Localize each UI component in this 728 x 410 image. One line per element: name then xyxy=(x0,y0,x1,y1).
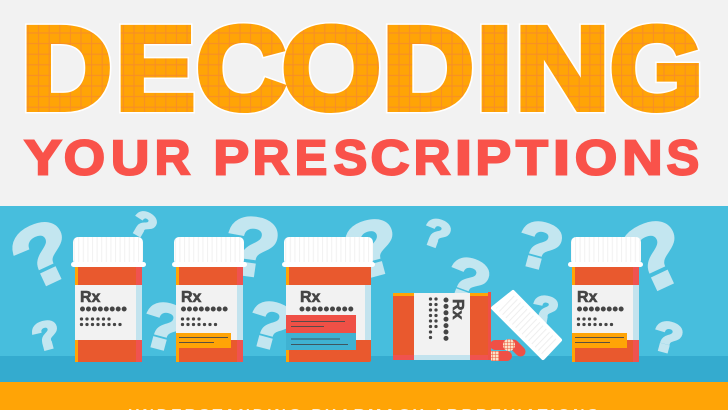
orange sticker xyxy=(572,333,627,348)
title: DECODING: D xyxy=(21,3,112,135)
question marks: ? xyxy=(28,311,65,360)
question marks: ? xyxy=(218,199,285,297)
red sticker xyxy=(286,315,356,333)
label text: Rx: Rx xyxy=(181,289,202,306)
subtitle: YOUR PRESCRIPTIONS: S xyxy=(666,132,699,186)
subtitle: YOUR PRESCRIPTIONS: R xyxy=(155,132,190,186)
bottle cap: fallen xyxy=(493,292,560,358)
question marks xyxy=(0,196,705,367)
title: DECODING xyxy=(21,3,703,135)
title: DECODING: E xyxy=(116,3,195,135)
bottle 1 xyxy=(71,237,146,362)
subtitle: YOUR PRESCRIPTIONS: R xyxy=(414,132,450,186)
title: DECODING: O xyxy=(282,3,381,135)
pills xyxy=(490,337,528,361)
orange sticker xyxy=(176,333,231,348)
subtitle: YOUR PRESCRIPTIONS: P xyxy=(475,132,511,186)
title: DECODING: N xyxy=(515,3,610,135)
subtitle: YOUR PRESCRIPTIONS: P xyxy=(213,132,249,186)
background: shelf xyxy=(0,356,728,382)
title: DECODING: I xyxy=(476,3,513,135)
subtitle: YOUR PRESCRIPTIONS: N xyxy=(622,132,663,186)
subtitle: YOUR PRESCRIPTIONS: O xyxy=(64,132,105,186)
subtitle: YOUR PRESCRIPTIONS: U xyxy=(111,132,149,186)
label text: Rx rotated: Rx xyxy=(449,299,466,320)
title: DECODING: G xyxy=(610,3,703,135)
subtitle: YOUR PRESCRIPTIONS: C xyxy=(370,132,410,186)
background: blue wall xyxy=(0,206,728,358)
blue sticker xyxy=(286,333,356,350)
label text: Rx: Rx xyxy=(300,289,321,306)
question marks: ? xyxy=(240,286,302,366)
title: DECODING: G xyxy=(610,3,703,135)
subtitle: YOUR PRESCRIPTIONS: T xyxy=(516,132,548,186)
question marks: ? xyxy=(124,203,163,247)
question marks: ? xyxy=(648,312,687,364)
bottle 2 xyxy=(172,237,247,362)
question marks: ? xyxy=(436,241,499,319)
question marks: ? xyxy=(529,289,561,332)
label text: Rx: Rx xyxy=(80,289,101,306)
subtitle: YOUR PRESCRIPTIONS: E xyxy=(295,132,327,186)
background: header xyxy=(0,0,728,206)
footer band xyxy=(0,382,728,410)
title: DECODING: C xyxy=(196,3,286,135)
subtitle: YOUR PRESCRIPTIONS: I xyxy=(553,132,570,186)
subtitle: YOUR PRESCRIPTIONS: I xyxy=(455,132,472,186)
subtitle: YOUR PRESCRIPTIONS: R xyxy=(253,132,290,186)
bottle 5 xyxy=(568,237,643,362)
bottle 3 xyxy=(282,237,375,362)
question marks: ? xyxy=(335,200,409,297)
question marks: ? xyxy=(603,196,705,317)
subtitle: YOUR PRESCRIPTIONS: S xyxy=(334,132,367,186)
title: DECODING: O xyxy=(282,3,381,135)
title: DECODING: E xyxy=(116,3,195,135)
label text: Rx: Rx xyxy=(577,289,598,306)
question marks: ? xyxy=(134,287,196,367)
question marks: ? xyxy=(417,211,456,258)
title: DECODING: D xyxy=(382,3,474,135)
title: DECODING: I xyxy=(476,3,513,135)
title: DECODING: N xyxy=(515,3,610,135)
subtitle: YOUR PRESCRIPTIONS: O xyxy=(575,132,617,186)
title: DECODING: D xyxy=(382,3,474,135)
bottle 4: tipped over xyxy=(393,292,491,360)
question marks: ? xyxy=(509,206,571,286)
title: DECODING: D xyxy=(21,3,112,135)
subtitle: YOUR PRESCRIPTIONS: Y xyxy=(24,132,62,186)
title: DECODING: C xyxy=(196,3,286,135)
